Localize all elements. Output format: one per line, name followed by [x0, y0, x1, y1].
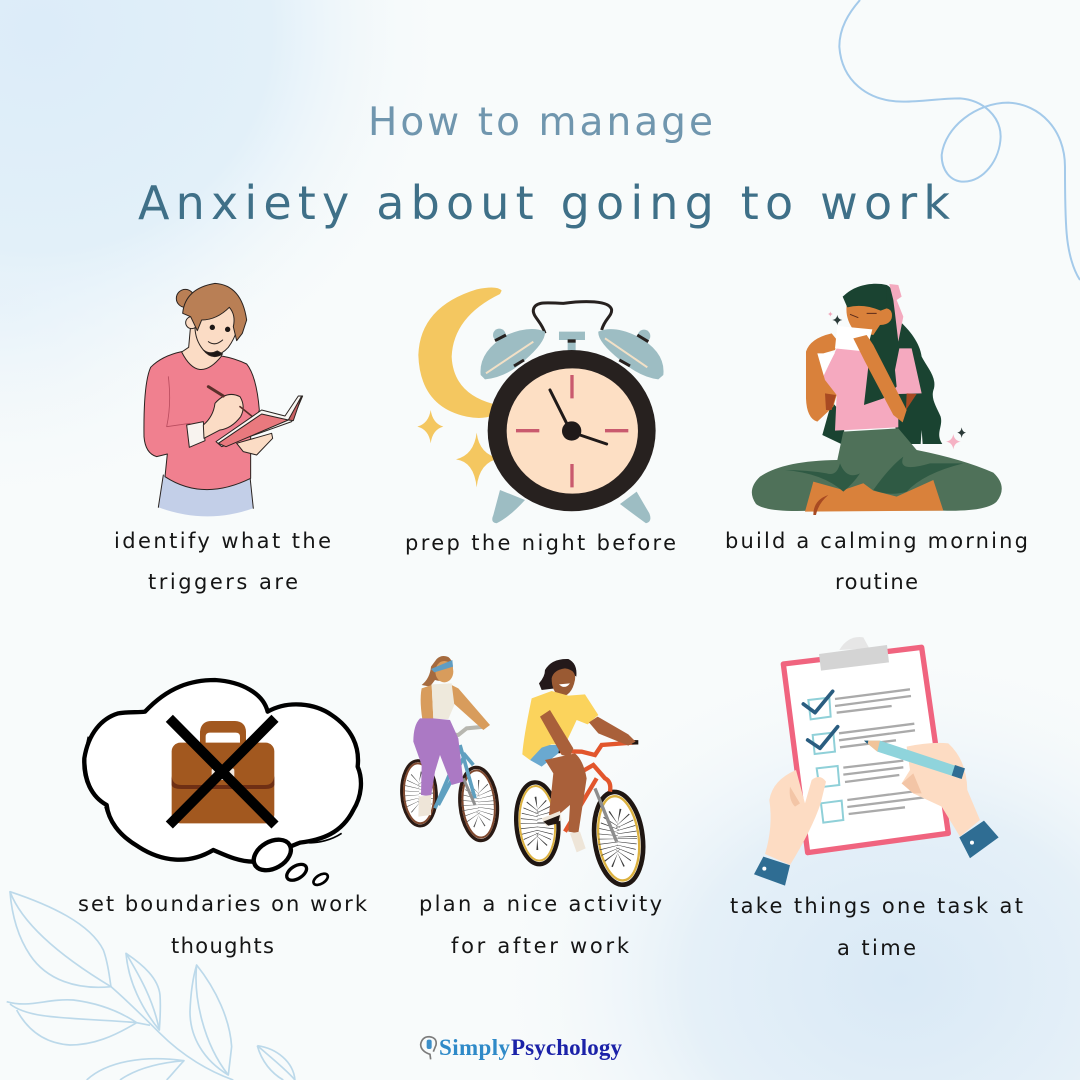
caption: prep the night before [405, 531, 676, 555]
icon: woman sipping a drink cross-legged [752, 284, 1002, 515]
caption: triggers are [148, 570, 298, 594]
icon: hands filling in a checklist clipboard [754, 637, 999, 886]
icon: moon, stars and alarm clock [417, 287, 664, 523]
back bike [400, 727, 500, 842]
caption: identify what the [114, 529, 331, 553]
caption [78, 892, 368, 958]
decorative leaves bottom left [7, 892, 295, 1080]
caption [730, 894, 1023, 960]
caption: thoughts [171, 934, 274, 958]
panel: boundaries on work thoughts [78, 680, 368, 958]
front bike [514, 742, 648, 888]
icon: head silhouette [421, 1037, 436, 1059]
icon: two people riding bicycles [400, 656, 648, 888]
panel: one task at a time [730, 637, 1023, 960]
caption [725, 529, 1028, 594]
caption [114, 529, 331, 594]
panel: identify triggers [114, 283, 331, 594]
panel: nice activity after work [400, 656, 662, 958]
logo: Simply Psychology: Simply [439, 1035, 510, 1060]
title [138, 100, 950, 230]
caption: plan a nice activity [419, 892, 662, 916]
headline: Anxiety about going to work [138, 176, 950, 230]
logo: Simply Psychology: Psychology [511, 1035, 622, 1060]
back rider [413, 656, 490, 817]
caption [419, 892, 662, 958]
caption: set boundaries on work [78, 892, 368, 916]
decorative swirl line top right [839, 0, 1080, 280]
front rider [522, 659, 636, 852]
caption: a time [837, 936, 916, 960]
icon: thought bubble with crossed-out briefcase [84, 680, 361, 887]
icon: woman writing in a notebook [144, 283, 303, 516]
logo: Simply Psychology [421, 1035, 622, 1060]
subtitle: how to manage: How to manage [368, 100, 713, 145]
caption: build a calming morning [725, 529, 1028, 553]
panel: prep the night before [405, 287, 676, 555]
panel: calming morning routine [725, 284, 1028, 594]
caption: for after work [451, 934, 630, 958]
caption: take things one task at [730, 894, 1023, 918]
caption: routine [835, 570, 918, 594]
